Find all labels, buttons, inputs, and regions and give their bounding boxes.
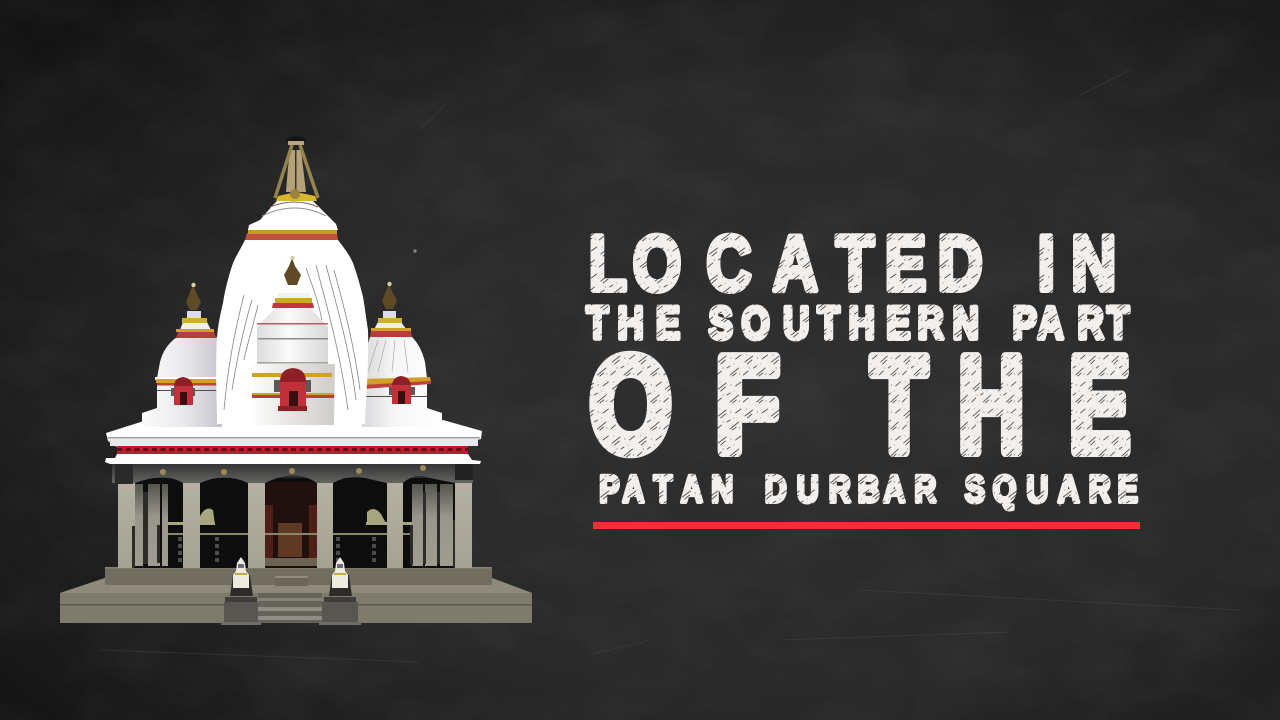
headline text [586,219,1140,529]
stone plinth and steps [60,567,532,625]
red shrine right [389,376,415,404]
temple illustration [60,136,532,625]
pillar shadows [132,492,455,568]
line: patan durbar square: PATAN DURBAR SQUARE [599,469,1138,511]
red underline [593,522,1140,529]
main dome [216,200,368,424]
word: of: OF [590,328,780,480]
eave beam with gold ornaments [112,460,473,484]
red shrine left [171,377,195,405]
red shrine centre [274,368,311,411]
left small dome [142,283,222,427]
line: the southern part: THE SOUTHERN PART [586,298,1129,348]
pillars [118,483,472,568]
line: of the [590,328,1130,480]
roof with red frieze [105,420,482,464]
guardian lion left [230,557,253,596]
gold spire [275,136,318,201]
colonnade interior [130,478,460,568]
right small dome [362,282,442,427]
line: located in: LOCATED IN [589,219,1116,307]
central tower [249,256,335,425]
word: the: THE [871,331,1130,480]
guardian lion right [329,557,352,596]
